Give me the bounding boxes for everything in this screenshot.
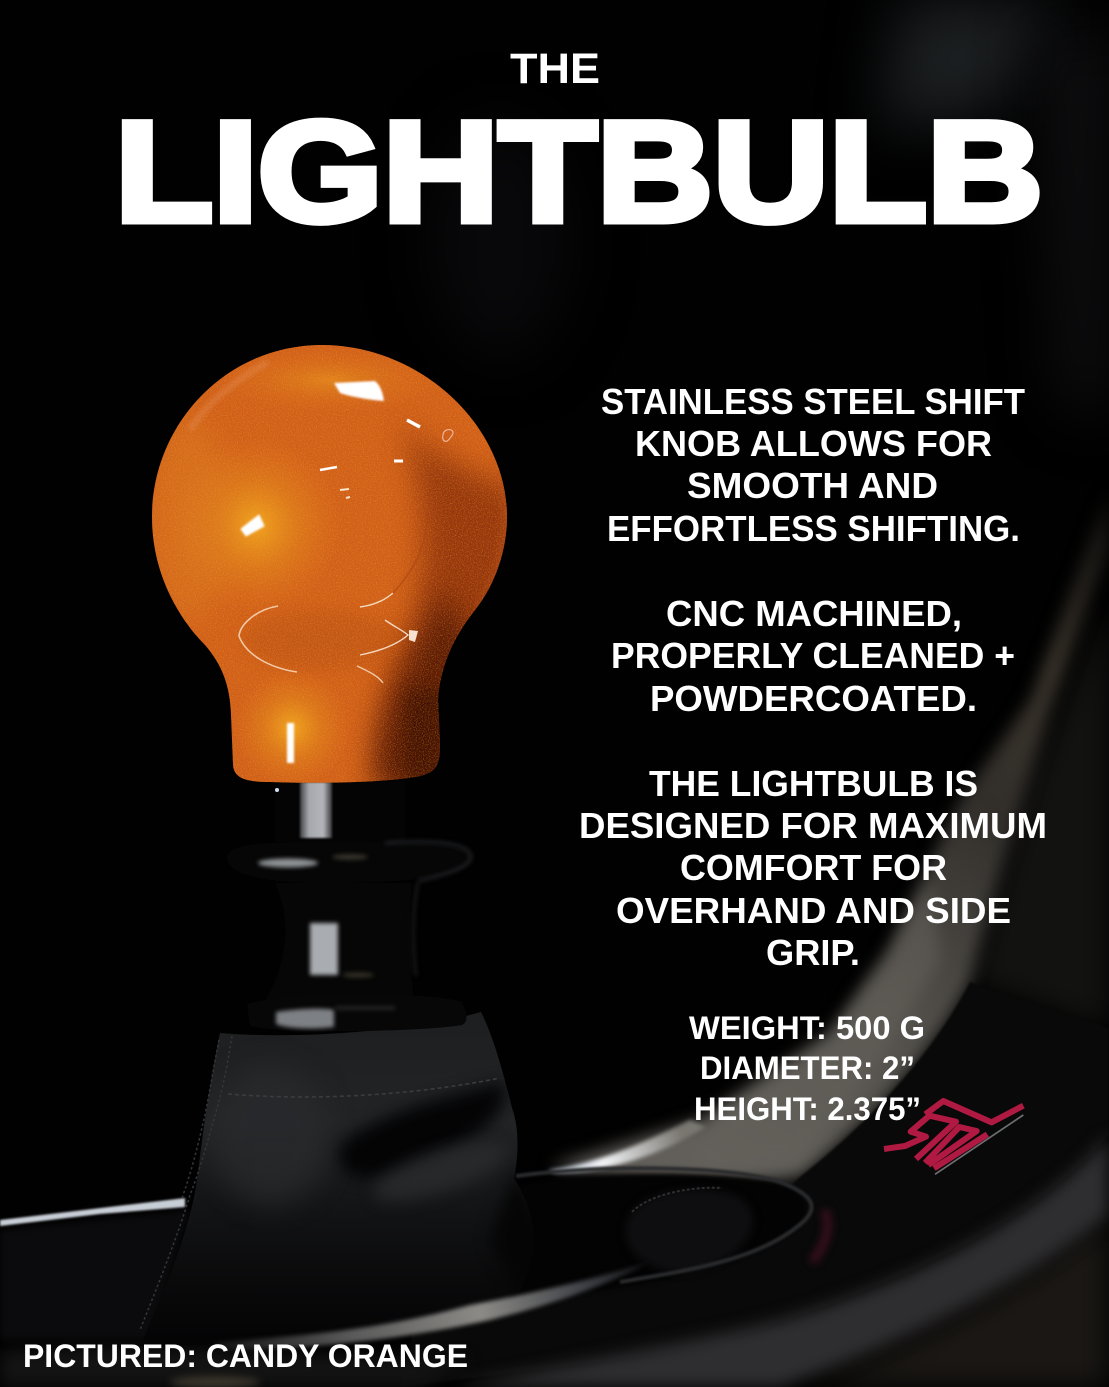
- shifter console ring: [500, 1168, 828, 1300]
- lower ring highlight sweep: [215, 1262, 650, 1350]
- text block: specifications: DIAMETER: 2”: [700, 1050, 915, 1086]
- lower ring: [247, 994, 466, 1031]
- text block: stainless steel description: EFFORTLESS SHIFTING.: [607, 508, 1020, 549]
- knob reflections: [239, 381, 453, 763]
- upper shaft: [275, 782, 405, 842]
- icon: STI badge: [884, 1101, 1023, 1174]
- text block: comfort description: OVERHAND AND SIDE: [616, 890, 1011, 931]
- text block: stainless steel description: [601, 381, 1025, 549]
- boot seam stitching: [228, 1078, 500, 1097]
- text block: comfort description: DESIGNED FOR MAXIMUM: [579, 805, 1047, 846]
- left light streak: [0, 1198, 185, 1226]
- text block: specifications: [689, 1010, 925, 1127]
- shift shaft and collar: [227, 782, 471, 1031]
- text block: CNC machined description: CNC MACHINED,: [666, 593, 962, 634]
- caption: pictured colour: PICTURED: CANDY ORANGE: [23, 1338, 468, 1374]
- lower sweeping trim: [0, 1135, 1109, 1387]
- carbon fiber panel: [400, 982, 1109, 1387]
- boot fold shadow: [335, 1082, 505, 1178]
- text block: stainless steel description: KNOB ALLOWS FOR: [635, 423, 992, 464]
- text block: specifications: WEIGHT: 500 G: [689, 1010, 925, 1046]
- text block: CNC machined description: [611, 593, 1015, 719]
- text block: comfort description: THE LIGHTBULB IS: [649, 763, 978, 804]
- collar: [227, 842, 471, 883]
- lower neck: [265, 883, 414, 1002]
- text block: CNC machined description: PROPERLY CLEANED +: [611, 635, 1015, 676]
- curved silver console band: [548, 490, 1109, 1183]
- shift knob: candy orange lightbulb: [150, 345, 530, 790]
- text block: comfort description: [579, 763, 1047, 973]
- text block: stainless steel description: STAINLESS STEEL SHIFT: [601, 381, 1025, 422]
- text block: comfort description: COMFORT FOR: [680, 847, 947, 888]
- text block: comfort description: GRIP.: [766, 932, 860, 973]
- text block: stainless steel description: SMOOTH AND: [687, 465, 938, 506]
- text block: specifications: HEIGHT: 2.375”: [694, 1091, 921, 1127]
- heading: THE: THE: [510, 45, 600, 93]
- text block: CNC machined description: POWDERCOATED.: [650, 678, 977, 719]
- shift boot: black leather: [140, 1012, 520, 1329]
- heading: LIGHTBULB: LIGHTBULB: [115, 93, 1043, 252]
